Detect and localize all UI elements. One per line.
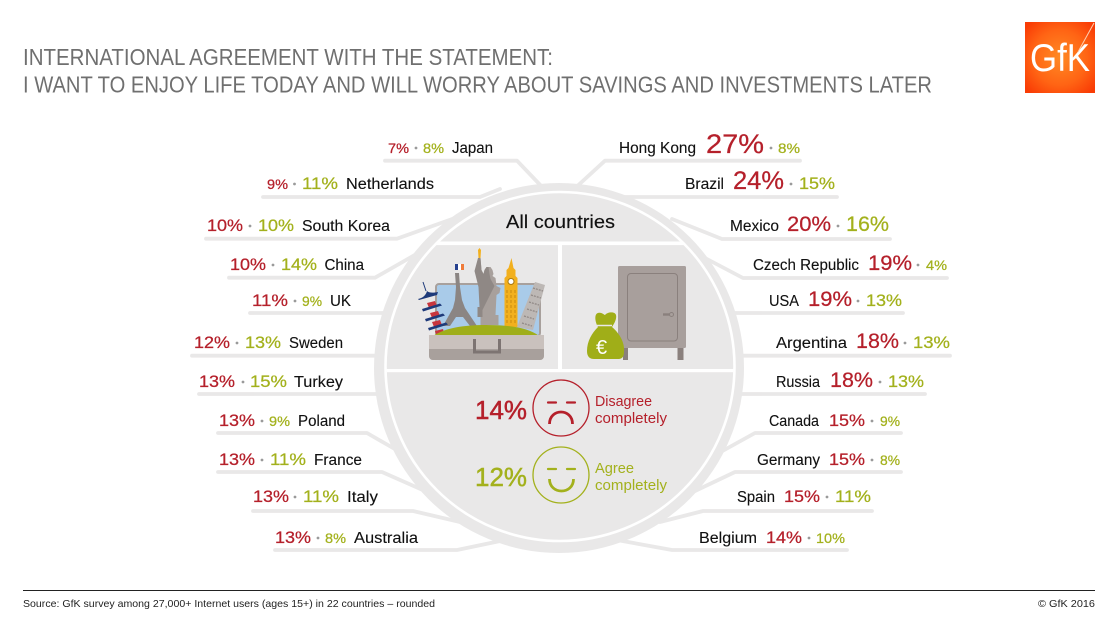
row: Russia: 13% [888, 372, 924, 391]
money bag [587, 312, 624, 359]
row: Australia [275, 528, 418, 547]
row: Belgium: Belgium [699, 530, 757, 547]
heading: All countries: All countries [506, 211, 615, 232]
row: Belgium: 14% [766, 528, 802, 547]
row: France [219, 450, 362, 469]
row: Italy: Italy [347, 489, 378, 506]
row: Sweden [194, 333, 343, 352]
icon: happy face [533, 447, 589, 503]
row: Spain [737, 487, 871, 506]
Big Ben [504, 258, 518, 327]
icon: safe and money bag [587, 266, 686, 360]
title: INTERNATIONAL AGREEMENT WITH THE STATEMENT: [23, 44, 553, 70]
row: Sweden: Sweden [289, 335, 343, 352]
row: Hong Kong: 27% [706, 129, 764, 159]
row: Hong Kong: 8% [778, 140, 800, 156]
icon: suitcase with world landmarks [418, 248, 545, 360]
row: Australia: Australia [354, 530, 418, 547]
row: China: China [324, 257, 364, 274]
row: France: 13% [219, 450, 255, 469]
row: Spain: 11% [835, 487, 871, 506]
case body [429, 335, 544, 360]
row: USA [769, 288, 902, 311]
row: USA: USA [769, 293, 800, 310]
row: Turkey: 15% [250, 372, 287, 391]
connector lines [192, 161, 950, 550]
row: Belgium: 10% [816, 530, 845, 546]
row: Canada [769, 411, 900, 430]
row: UK: 9% [302, 293, 322, 309]
row: Spain: 15% [784, 487, 820, 506]
row: France: 11% [270, 450, 306, 469]
row: Italy: 11% [303, 487, 339, 506]
row: UK: UK [330, 293, 352, 310]
row: China [230, 255, 364, 274]
row: South Korea: South Korea [302, 218, 390, 235]
Statue of Liberty [474, 248, 500, 325]
row: South Korea: 10% [207, 216, 243, 235]
row: South Korea [207, 216, 390, 235]
row: Spain: Spain [737, 489, 775, 506]
row: Poland: 9% [269, 413, 290, 429]
row: Turkey: 13% [199, 372, 235, 391]
copyright: © GfK 2016 [1038, 598, 1095, 610]
row: Germany: 15% [829, 450, 865, 469]
GfK logo: GfK [1030, 37, 1090, 80]
Eiffel tower [443, 273, 477, 326]
row: Italy: 13% [253, 487, 289, 506]
row: China: 14% [281, 255, 317, 274]
icon: safe and money bag: € [596, 337, 607, 359]
French flag [455, 264, 464, 270]
row: Canada: 15% [829, 411, 865, 430]
row: Argentina: 18% [856, 330, 899, 353]
row: Mexico: 20% [787, 213, 831, 236]
row: Mexico [730, 213, 889, 236]
row: Netherlands [267, 174, 434, 193]
stat: disagree completely: completely [595, 410, 667, 427]
row: Turkey: Turkey [294, 374, 343, 391]
row: Japan [388, 140, 493, 157]
row: Russia: Russia [776, 374, 820, 391]
row: Argentina [776, 330, 950, 353]
row: USA: 19% [808, 288, 852, 311]
row: Australia: 8% [325, 530, 346, 546]
stat: disagree completely: Disagree [595, 393, 652, 410]
row: Japan: 7% [388, 140, 409, 156]
row: Japan: Japan [452, 140, 493, 157]
handle [474, 339, 500, 352]
row: Germany: 8% [880, 452, 900, 468]
title [23, 44, 932, 98]
row: Russia: 18% [830, 369, 873, 392]
row: USA: 13% [866, 291, 902, 310]
row: Netherlands: 9% [267, 176, 288, 192]
row: Sweden: 13% [245, 333, 281, 352]
stat: agree completely: completely [595, 477, 667, 494]
stat: disagree completely: 14% [475, 395, 527, 425]
row: Brazil: 15% [799, 174, 835, 193]
row: Argentina: 13% [913, 333, 950, 352]
row: Brazil: 24% [733, 167, 784, 195]
pagoda [418, 282, 448, 334]
row: Poland: Poland [298, 413, 345, 430]
stat: agree completely [475, 447, 667, 503]
row: Turkey [199, 372, 343, 391]
row: South Korea: 10% [258, 216, 294, 235]
row: Argentina: Argentina [776, 335, 847, 352]
GfK logo [1025, 22, 1095, 93]
row: Canada: Canada [769, 413, 819, 430]
title: I WANT TO ENJOY LIFE TODAY AND WILL WORRY ABOUT SAVINGS AND INVESTMENTS LATER [23, 72, 932, 98]
row: Brazil: Brazil [685, 176, 724, 193]
row: Czech Republic [753, 252, 947, 275]
row: Hong Kong [619, 129, 800, 159]
Leaning tower of Pisa [517, 282, 545, 330]
source note: Source: GfK survey among 27,000+ Internet users (ages 15+) in 22 countries – rounded [23, 598, 435, 610]
row: UK: 11% [252, 291, 288, 310]
row: Canada: 9% [880, 413, 900, 429]
row: Hong Kong: Hong Kong [619, 140, 696, 157]
row: Brazil [685, 167, 835, 195]
row: Australia: 13% [275, 528, 311, 547]
row: Mexico: 16% [846, 213, 889, 236]
row: Germany [757, 450, 900, 469]
stat: disagree completely [475, 380, 667, 436]
row: Belgium [699, 528, 845, 547]
hill [433, 325, 539, 336]
icon: sad face [533, 380, 589, 436]
footer rule [23, 590, 1095, 591]
row: Czech Republic: 4% [926, 257, 947, 273]
row: UK [252, 291, 352, 310]
stat: agree completely: 12% [475, 462, 527, 492]
row: Czech Republic: 19% [868, 252, 912, 275]
row: Poland [219, 411, 345, 430]
row: Sweden: 12% [194, 333, 230, 352]
row: Germany: Germany [757, 452, 820, 469]
row: China: 10% [230, 255, 266, 274]
row: Netherlands: Netherlands [346, 176, 434, 193]
row: Japan: 8% [423, 140, 444, 156]
row: France: France [314, 452, 362, 469]
central circle [374, 183, 744, 553]
row: Mexico: Mexico [730, 218, 779, 235]
row: Czech Republic: Czech Republic [753, 257, 859, 274]
row: Italy [253, 487, 378, 506]
row: Russia [776, 369, 924, 392]
row: Netherlands: 11% [302, 174, 338, 193]
stat: agree completely: Agree [595, 460, 634, 477]
row: Poland: 13% [219, 411, 255, 430]
